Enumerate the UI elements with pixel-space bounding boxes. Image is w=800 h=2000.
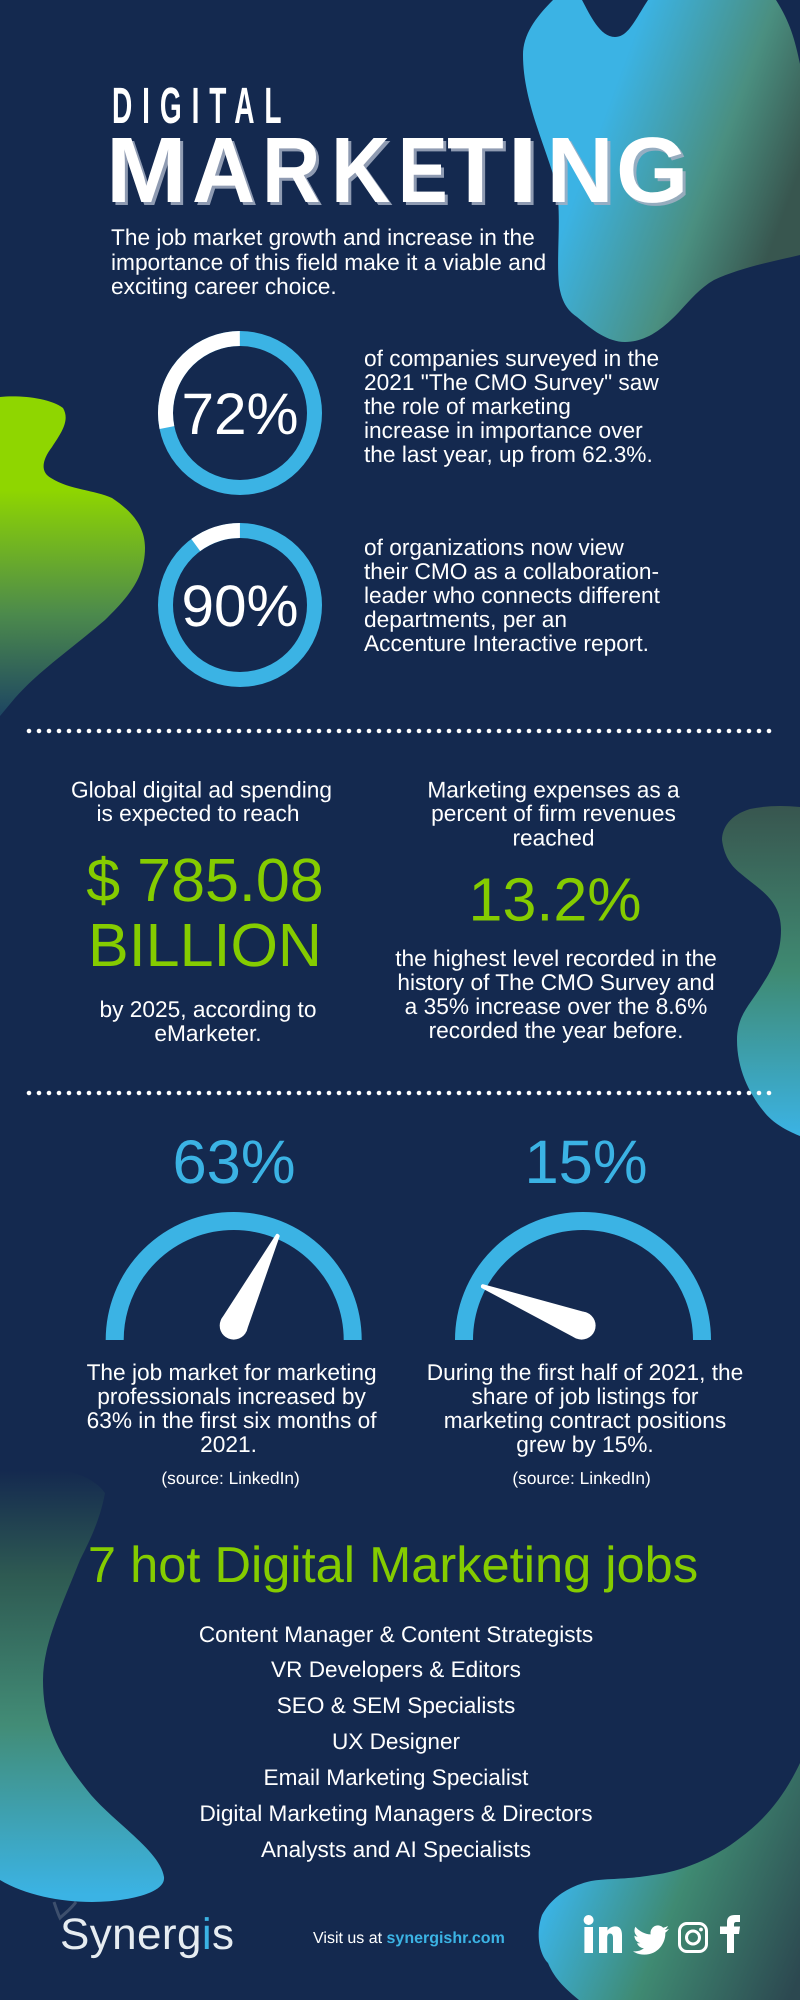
expenses figure: 13.2% <box>469 866 641 934</box>
source: 15%: (source: LinkedIn) <box>512 1468 651 1488</box>
icon: twitter <box>633 1925 669 1955</box>
stat text: 72%: increase in importance over <box>364 417 643 443</box>
gauge text: 63%: The job market for marketing <box>87 1359 377 1385</box>
panel: ad spending <box>71 776 332 1046</box>
icon: instagram <box>680 1924 706 1952</box>
stat text: 72%: of companies surveyed in the <box>364 345 659 371</box>
figure: 63%: 63% <box>172 1128 296 1197</box>
ad spending source text <box>100 996 316 1046</box>
expenses detail text: a 35% increase over the 8.6% <box>405 993 707 1019</box>
ad spending lead text: is expected to reach <box>96 800 300 826</box>
blob: bottom left <box>0 1466 164 1902</box>
gauge text: 15% <box>427 1359 743 1457</box>
gauge text: 15%: share of job listings for <box>472 1383 699 1409</box>
stat text: 90%: of organizations now view <box>364 534 624 560</box>
job list: SEO & SEM Specialists <box>277 1693 515 1718</box>
ad spending source text: by 2025, according to <box>100 996 316 1022</box>
source: 63%: (source: LinkedIn) <box>161 1468 300 1488</box>
gauge: 15% <box>464 1221 702 1340</box>
gauge text: 63%: 63% in the first six months of <box>87 1407 377 1433</box>
ad spending figure: $ 785.08 <box>86 846 324 914</box>
donut chart: 72% <box>153 326 327 500</box>
stat text: 90%: departments, per an <box>364 606 567 632</box>
ad spending lead text: Global digital ad spending <box>71 776 332 802</box>
title line: MARKETING: E <box>398 118 448 222</box>
ad spending lead text <box>71 776 332 826</box>
intro text: importance of this field make it a viable and <box>111 249 546 275</box>
expenses detail text <box>395 945 717 1043</box>
blob: right middle <box>722 806 800 1136</box>
ad spending figure <box>86 846 324 979</box>
gauge text: 63%: professionals increased by <box>97 1383 367 1409</box>
expenses lead text: reached <box>512 824 594 850</box>
title line: MARKETING: A <box>192 118 255 222</box>
gauge: 63% <box>115 1221 353 1340</box>
expenses lead text: percent of firm revenues <box>431 800 676 826</box>
title line: MARKETING <box>106 118 688 222</box>
title line: MARKETING: M <box>106 118 187 222</box>
blob: top right <box>523 0 800 342</box>
expenses lead text <box>427 776 680 850</box>
stat text: 90%: their CMO as a collaboration- <box>364 558 659 584</box>
job list: VR Developers & Editors <box>271 1657 521 1682</box>
intro text: exciting career choice. <box>111 273 337 299</box>
stat text: 90%: Accenture Interactive report. <box>364 630 649 656</box>
title line: MARKETING: R <box>262 118 320 222</box>
blob: bottom right <box>539 1763 800 2000</box>
job list <box>199 1622 593 1862</box>
donut chart: 72%: 72% <box>181 382 299 447</box>
title line: MARKETING: K <box>331 118 390 222</box>
blob: left green <box>0 396 145 716</box>
donut chart: 90%: 90% <box>181 574 299 639</box>
heading: 7 hot jobs: 7 hot Digital Marketing jobs <box>88 1536 698 1593</box>
title line: DIGITAL: DIGITAL <box>112 77 291 134</box>
needle <box>481 1284 596 1340</box>
stat text: 72%: 2021 "The CMO Survey" saw <box>364 369 659 395</box>
ad spending figure: BILLION <box>88 911 322 979</box>
expenses lead text: Marketing expenses as a <box>427 776 680 802</box>
stat text: 72%: the role of marketing <box>364 393 571 419</box>
icon: linkedin <box>584 1915 622 1953</box>
job list: Analysts and AI Specialists <box>261 1837 531 1862</box>
gauge text: 15%: During the first half of 2021, the <box>427 1359 743 1385</box>
gauge text: 15%: grew by 15%. <box>516 1431 654 1457</box>
ad spending source text: eMarketer. <box>154 1020 262 1046</box>
footer link: Visit us at synergishr.com <box>313 1930 505 1947</box>
title line: MARKETING: N <box>546 118 614 222</box>
title line: MARKETING: G <box>616 118 688 222</box>
job list: Digital Marketing Managers & Directors <box>199 1801 593 1826</box>
icon: facebook <box>720 1915 740 1953</box>
expenses detail text: the highest level recorded in the <box>395 945 717 971</box>
social icons <box>584 1915 740 1955</box>
needle <box>220 1234 280 1340</box>
donut chart: 90% <box>136 501 344 709</box>
title line: MARKETING: T <box>447 118 504 222</box>
stat text: 90% <box>364 534 661 656</box>
intro text <box>111 224 546 299</box>
stat text: 72% <box>364 345 659 467</box>
title <box>106 77 688 222</box>
gauge text: 63%: 2021. <box>200 1431 257 1457</box>
panel: marketing expenses <box>395 776 717 1043</box>
title line: MARKETING: I <box>507 118 538 222</box>
expenses detail text: history of The CMO Survey and <box>397 969 715 995</box>
stat text: 90%: leader who connects different <box>364 582 661 608</box>
job list: Content Manager & Content Strategists <box>199 1622 593 1647</box>
expenses detail text: recorded the year before. <box>429 1017 683 1043</box>
figure: 15%: 15% <box>524 1128 648 1197</box>
job list: UX Designer <box>332 1729 461 1754</box>
intro text: The job market growth and increase in the <box>111 224 535 250</box>
gauge text: 15%: marketing contract positions <box>444 1407 726 1433</box>
logo: Synergis: Synergis <box>60 1910 234 1959</box>
stat text: 72%: the last year, up from 62.3%. <box>364 441 653 467</box>
gauge text: 63% <box>87 1359 377 1457</box>
job list: Email Marketing Specialist <box>264 1765 529 1790</box>
